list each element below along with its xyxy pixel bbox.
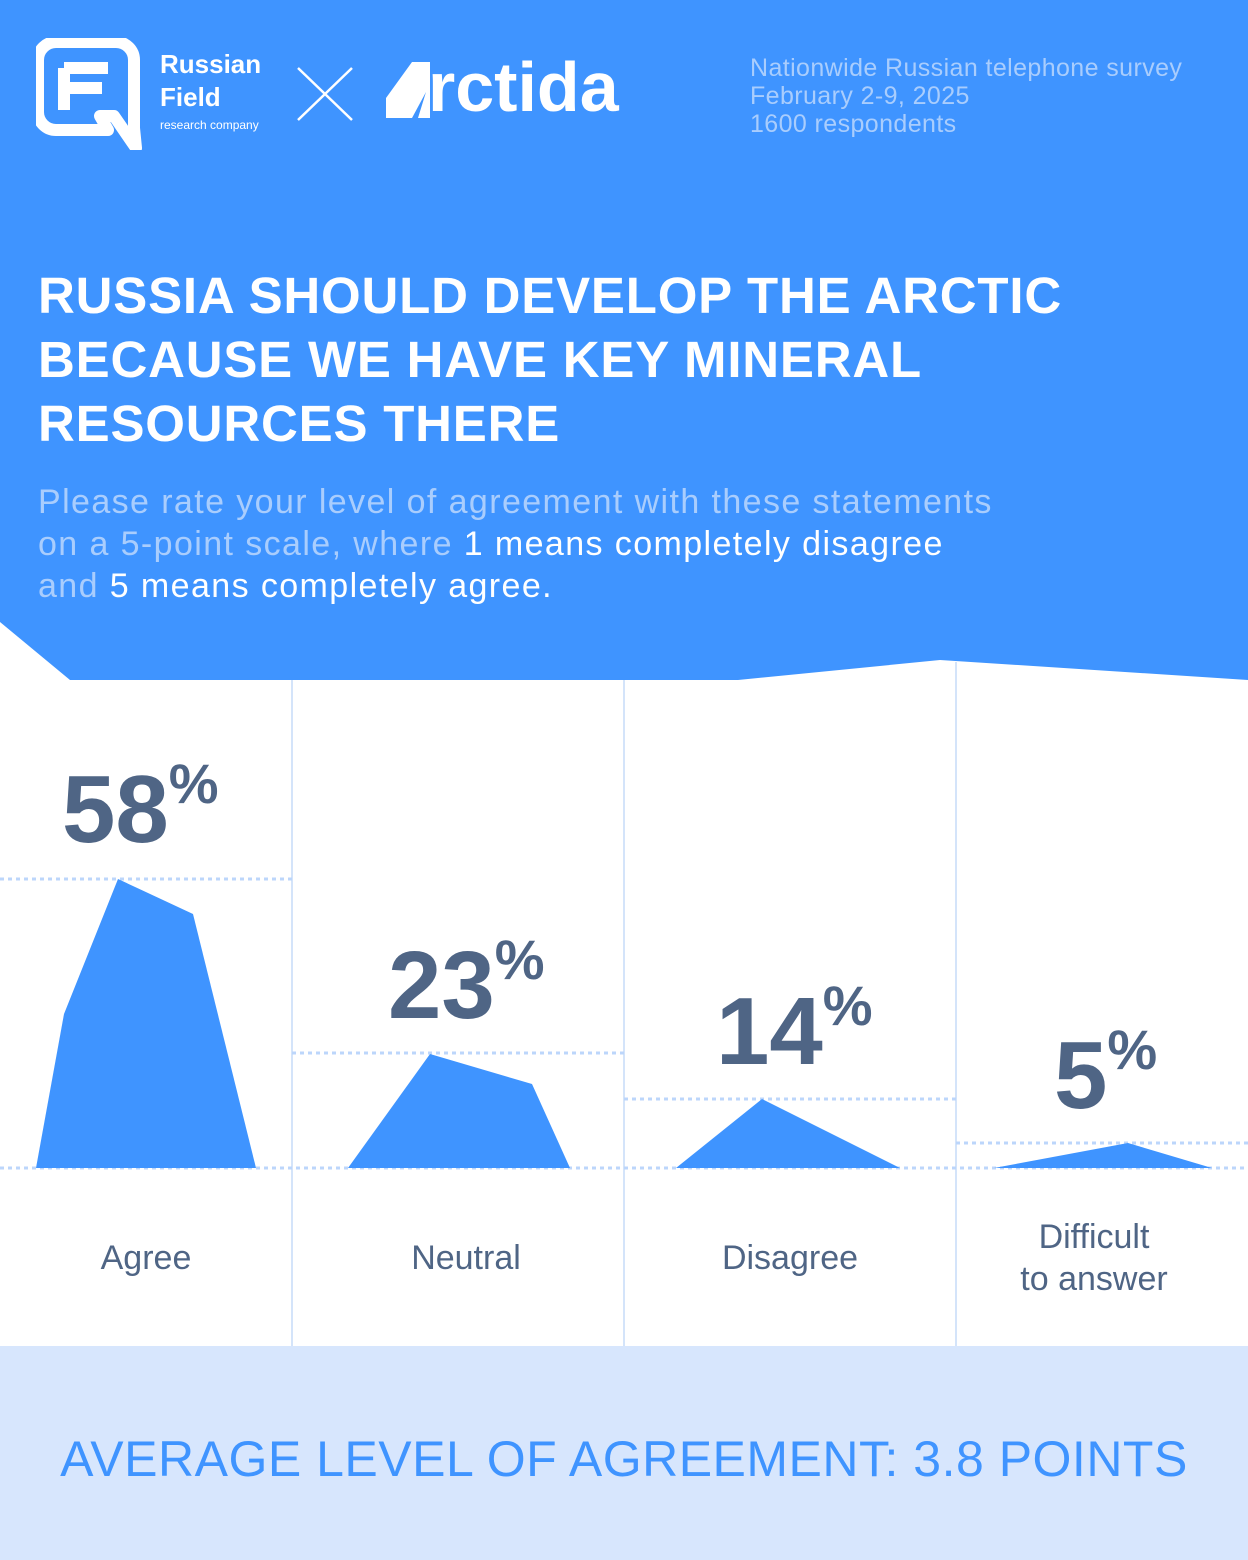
logo: Russian Field (36, 38, 261, 150)
logo: Arctida: rctida (428, 48, 619, 126)
subtitle: on a 5-point scale, where 1 means completely disagree (38, 525, 944, 563)
icon: cross (297, 67, 353, 121)
value: Disagree 14%: 14% (716, 974, 873, 1085)
survey info: Nationwide Russian telephone survey (750, 54, 1182, 82)
label: Difficult to answer (1020, 1218, 1168, 1298)
title: RESOURCES THERE (38, 395, 560, 452)
logo: Russian Field: Russian (160, 49, 261, 79)
title: RUSSIA SHOULD DEVELOP THE ARCTIC (38, 267, 1062, 324)
survey info: 1600 respondents (750, 110, 957, 138)
survey info (750, 54, 1182, 138)
label: Agree: Agree (101, 1239, 191, 1277)
logo: Russian Field: research company (160, 118, 259, 132)
subtitle: Please rate your level of agreement with these statements (38, 483, 993, 521)
label: Difficult to answer: to answer (1020, 1260, 1168, 1298)
title (38, 267, 1062, 452)
footer: average: AVERAGE LEVEL OF AGREEMENT: 3.8 POINTS (60, 1431, 1188, 1487)
label: Disagree: Disagree (722, 1239, 858, 1277)
value: Difficult 5%: 5% (1054, 1018, 1157, 1129)
label: Difficult to answer: Difficult (1039, 1218, 1149, 1256)
subtitle: and 5 means completely agree. (38, 567, 553, 605)
survey info: February 2-9, 2025 (750, 82, 970, 110)
subtitle (38, 483, 993, 605)
value: Neutral 23%: 23% (388, 928, 545, 1039)
chart: shapes (36, 879, 1212, 1168)
logo: Russian Field: Field (160, 82, 221, 112)
label: Neutral: Neutral (411, 1239, 521, 1277)
value: Agree 58%: 58% (62, 752, 219, 863)
title: BECAUSE WE HAVE KEY MINERAL (38, 331, 922, 388)
